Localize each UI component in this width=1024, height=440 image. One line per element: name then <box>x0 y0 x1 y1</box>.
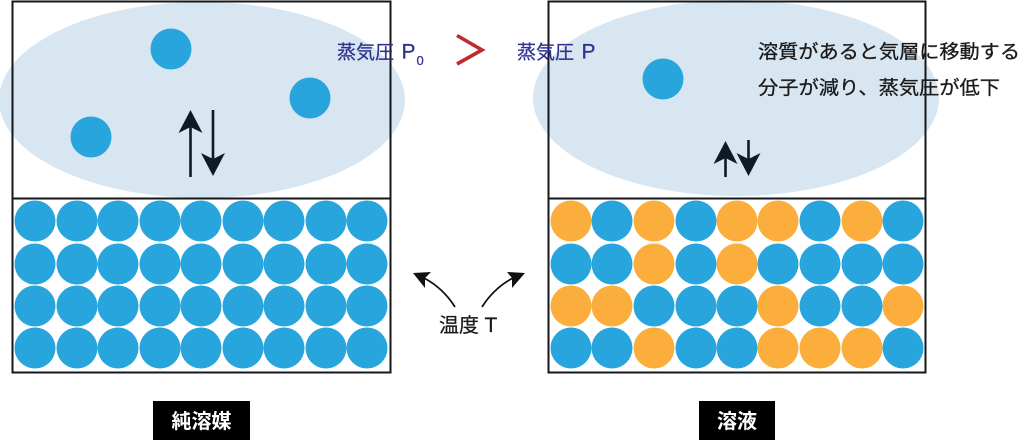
vapor cloud: pure solvent <box>0 2 405 198</box>
caption: pure solvent <box>153 401 250 440</box>
container frame: pure solvent <box>12 2 390 372</box>
arrows: evaporation and condensation, pure solvent <box>178 110 225 177</box>
explanation text: 溶質があると気層に移動する <box>758 41 1020 63</box>
vapor cloud: solution <box>533 0 939 196</box>
arrows: evaporation and condensation, solution <box>714 140 760 177</box>
symbol: greater than <box>457 36 482 64</box>
caption: solution <box>699 401 775 440</box>
label: vapor pressure P: P <box>582 40 596 64</box>
container frame: solution <box>548 2 926 372</box>
label: vapor pressure P: 蒸気圧 <box>517 42 574 64</box>
arrow: temperature to solution <box>482 272 525 307</box>
temperature label and arrows: T <box>484 314 498 337</box>
label: vapor pressure P0: 蒸気圧 <box>337 42 394 64</box>
vapor molecule: solution <box>642 58 684 100</box>
label: vapor pressure P0: P <box>402 40 416 64</box>
arrow: temperature to pure solvent <box>413 272 455 307</box>
explanation text <box>758 41 1020 99</box>
label: vapor pressure P0: 0 <box>416 53 424 68</box>
temperature label and arrows <box>413 272 525 337</box>
temperature label and arrows: 温度 <box>439 315 479 337</box>
liquid molecules: pure solvent <box>14 200 388 368</box>
caption: solution: 溶液 <box>717 410 757 433</box>
liquid molecules: solution <box>550 200 924 368</box>
caption: pure solvent: 純溶媒 <box>172 410 232 433</box>
explanation text: 分子が減り、蒸気圧が低下 <box>758 77 1000 99</box>
panel: solution <box>548 2 926 372</box>
panel: pure solvent <box>12 2 390 372</box>
vapor molecules: pure solvent <box>70 28 330 158</box>
